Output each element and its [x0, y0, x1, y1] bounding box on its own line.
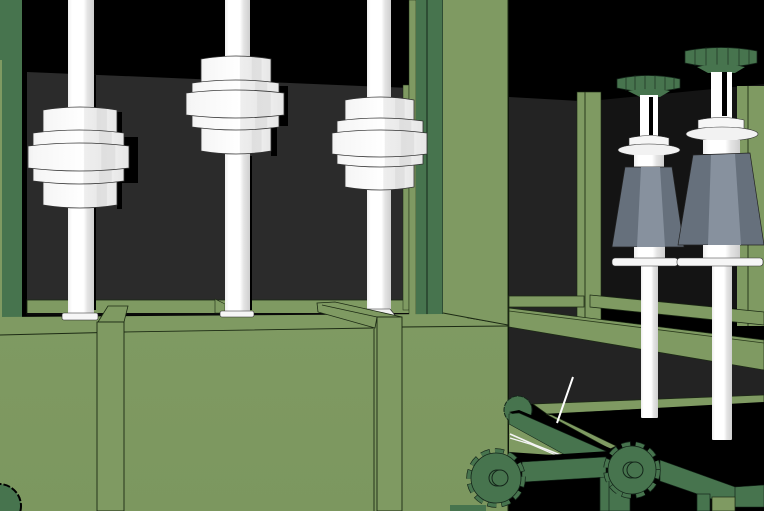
strap right: [317, 302, 402, 511]
slab: [509, 413, 610, 456]
white pointer line: [557, 377, 573, 423]
rear gear: [504, 396, 532, 424]
black floor: [500, 402, 764, 511]
far right posts: [577, 86, 764, 326]
rod feet: [62, 309, 395, 320]
right bench frame: [450, 460, 764, 511]
right actuator 2: [677, 47, 764, 440]
black slab edge: [509, 410, 612, 455]
right gear: [606, 444, 658, 496]
left gear: [469, 451, 523, 505]
front housing: [0, 0, 508, 511]
rails right: [509, 295, 764, 370]
floor rail: [533, 395, 764, 414]
strap left: [97, 306, 128, 511]
actuator 1: [28, 0, 138, 314]
light panel: [509, 424, 567, 456]
upright column: [403, 0, 443, 315]
white belt: [510, 434, 563, 456]
right actuator 1: [612, 75, 684, 418]
hand wheel: [617, 75, 680, 97]
cone: [612, 167, 684, 247]
back wall: [27, 72, 764, 404]
actuator 3: [332, 0, 427, 311]
corner gear: [0, 484, 21, 511]
hand wheel: [685, 47, 757, 73]
back ledge: [27, 299, 412, 316]
conveyor: [504, 377, 616, 456]
actuator 2: [186, 0, 288, 312]
light side strip: [546, 414, 616, 449]
cross bar: [515, 451, 610, 483]
left column: [0, 0, 27, 322]
cone: [678, 153, 764, 245]
